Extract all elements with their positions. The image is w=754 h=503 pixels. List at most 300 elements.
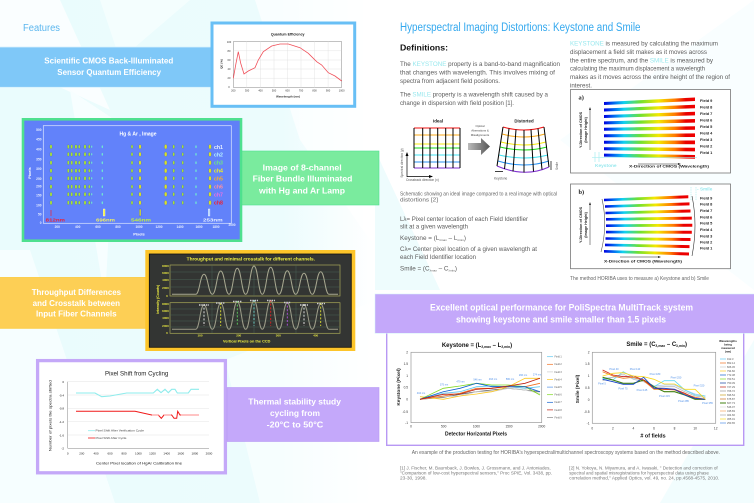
panel: pixel shift chart: -2 <box>61 446 64 450</box>
rainbow strips b <box>604 195 692 256</box>
chart: smile: Pixel 145 <box>637 388 648 392</box>
panel b: smile measurement: Field 3 <box>700 233 713 238</box>
panel: Hg and Ar image: 1000 <box>135 225 143 229</box>
keystone legend: Field 8 <box>554 409 562 412</box>
keystone legend <box>547 356 562 419</box>
keystone series <box>420 378 540 399</box>
channel colour overlays <box>204 300 321 326</box>
panel: quantum efficiency chart: 500 <box>272 88 277 92</box>
reference 1: [1] J. Fischer, M. Baumback, J. Bowles, J. Grossmann, and J. Antoniades, <box>400 465 551 471</box>
panel: quantum efficiency chart: 200 <box>231 88 236 92</box>
panel a: keystone measurement: (Image Height) <box>584 116 588 143</box>
panel: quantum efficiency chart: 100 <box>227 40 232 44</box>
chart: smile: Pixel 285 <box>678 399 689 403</box>
panel: Hg and Ar image: Pixels <box>133 232 146 236</box>
panel: pixel shift chart: -1.2 <box>59 420 64 424</box>
chart: smile <box>575 339 737 439</box>
channel labels: ch3 <box>214 161 223 167</box>
panel b: smile measurement: Field 1 <box>700 246 713 251</box>
smile legend: 750.39 <box>727 381 735 385</box>
panel: pixel shift chart: 1800 <box>192 451 199 455</box>
definition: keystone: The KEYSTONE property is a band-to-band magnification <box>400 61 561 68</box>
feature band: throughput and crosstalk <box>0 278 146 328</box>
chart: smile: Pixel 75 <box>618 386 628 390</box>
formula definitions: λmin <box>457 238 464 242</box>
panel: pixel shift chart: 400 <box>93 451 99 455</box>
chart: keystone: 479 nm <box>456 380 465 384</box>
panel: quantum efficiency chart: 40 <box>228 67 231 71</box>
panel: pixel shift chart: 1200 <box>149 451 156 455</box>
panel: throughput chart: 0 <box>166 331 168 335</box>
panel: throughput chart: 100 <box>197 333 203 337</box>
panel: throughput chart: 0 <box>166 294 168 298</box>
formula definitions: each Field Identifier location <box>400 254 477 261</box>
chart: smile: Pixel 110 <box>630 367 641 371</box>
measurement description: displacement a field slit makes as it moves across <box>570 49 707 56</box>
chart: smile: Pixel 250 <box>671 376 682 380</box>
chart: smile: 2 <box>588 350 590 354</box>
panel: Hg and Ar image: 2000 <box>228 223 236 227</box>
panel b: smile measurement <box>570 184 730 269</box>
spectral spots <box>50 144 211 205</box>
panel: pixel shift chart: 2000 <box>206 451 213 455</box>
smile series <box>603 370 705 399</box>
chart: keystone: 274 nm <box>533 374 541 376</box>
panel b: smile measurement: Field 6 <box>700 214 713 219</box>
smile legend: 696.54 <box>727 393 735 397</box>
definition: smile: change in dispersion with field position [1]. <box>400 100 514 107</box>
results banner: showing keystone and smile smaller than 1.5 pixels <box>456 314 666 324</box>
panel: throughput chart: 8000 <box>162 302 169 306</box>
panel: quantum efficiency chart: 700 <box>299 88 304 92</box>
smile legend: 763.51 <box>727 377 735 381</box>
panel: Hg and Ar image: 300 <box>36 167 42 171</box>
results panel frame <box>387 332 744 445</box>
panel a: keystone measurement: X-Direction of CMOS (Wavelength) <box>629 164 710 168</box>
panel: throughput chart: 300 <box>276 333 281 337</box>
ideal grid <box>400 119 460 182</box>
chart: keystone: 2 <box>406 350 408 354</box>
wavelength markers: 696nm <box>96 217 115 222</box>
chart: smile: λ,max <box>656 344 665 348</box>
chart: keystone: λ,max <box>481 345 491 349</box>
chart: keystone: Keystone (Pixel) <box>396 368 402 406</box>
panel b: smile measurement: Field 4 <box>700 227 713 232</box>
panel: quantum efficiency chart: 400 <box>258 88 263 92</box>
panel: quantum efficiency chart: 900 <box>326 88 331 92</box>
panel: Hg and Ar image: 200 <box>36 184 42 188</box>
panel: quantum efficiency chart: 1000 <box>339 88 345 92</box>
measurement description <box>570 41 730 89</box>
reference 1: "Comparison of low-cost hyperspectral sensors," Proc SPIE, Vol. 3438, pp. <box>400 470 552 476</box>
measurement description: the entire spectrum, and the SMILE is measured by <box>570 57 714 64</box>
reference 2: [2] N. Yokoya, N. Miyamura, and A. Iwasaki, " Detection and correction of <box>569 465 718 471</box>
panel: quantum efficiency chart: QE (%) <box>220 59 224 69</box>
chart: keystone: -1 <box>405 421 408 425</box>
panel: pixel shift chart <box>38 361 225 473</box>
chart: smile: 0.5 <box>585 386 590 390</box>
panel: Hg and Ar image: 500 <box>36 128 42 132</box>
feature band: fiber bundle image: with Hg and Ar Lamp <box>258 186 345 195</box>
chart: smile: Pixel 320 <box>694 384 705 388</box>
panel a: keystone measurement: Field 3 <box>700 137 713 142</box>
chart: smile: ) <box>685 342 687 348</box>
panel: Hg and Ar image: 350 <box>36 157 42 161</box>
results banner <box>375 294 754 333</box>
chart: keystone: 2000 <box>538 425 545 429</box>
channel labels: ch1 <box>214 145 223 151</box>
keystone legend: Field 7 <box>554 401 562 404</box>
formula definitions: λmin <box>448 269 455 273</box>
chart: keystone: ) <box>510 343 512 349</box>
channel labels: ch6 <box>214 185 223 191</box>
panel: Hg and Ar image: 0 <box>40 221 42 225</box>
smile legend: 912.3 <box>727 357 734 361</box>
measurement description: makes as it moves across the entire height of the region of <box>570 74 730 81</box>
keystone legend: Field 1 <box>554 356 562 359</box>
panel: pixel shift chart: -0.8 <box>59 407 64 411</box>
panel: pixel shift chart: 1600 <box>177 451 184 455</box>
chart: keystone: 463 nm <box>489 378 497 381</box>
method caption: The method HORIBA uses to measure a) Keystone and b) Smile <box>570 276 709 282</box>
chart: smile: 2 <box>612 427 614 431</box>
panel: quantum efficiency chart: 800 <box>312 88 317 92</box>
panel: pixel shift chart: Center Pixel location of HgAr Calibration line <box>96 461 182 465</box>
chart: smile: 1.5 <box>585 362 590 366</box>
smile legend: 404.66 <box>727 413 735 417</box>
smile legend: being <box>724 342 732 346</box>
panel: quantum efficiency chart: Wavelength (nm) <box>276 94 300 98</box>
formula definitions: ) <box>464 235 466 242</box>
panel b: smile measurement: Field 5 <box>700 221 713 226</box>
panel a: keystone measurement: Field 4 <box>700 130 713 135</box>
chart: smile: 1 <box>588 374 590 378</box>
panel: Hg and Ar image: 450 <box>36 137 42 141</box>
panel: throughput chart: 400 <box>313 333 319 337</box>
panel: Hg and Ar image: Hg & Ar , Image <box>119 132 157 138</box>
feature band: thermal stability: -20°C to 50°C <box>267 420 324 429</box>
panel: Hg and Ar image: 100 <box>36 204 42 208</box>
panel: pixel shift chart: 600 <box>107 451 113 455</box>
panel: throughput chart: 6000 <box>162 271 169 275</box>
panel: Hg and Ar image: 400 <box>36 148 42 152</box>
panel: throughput chart: 2000 <box>162 286 169 290</box>
chart: smile: Smile = (C <box>626 342 656 348</box>
chart: keystone: Detector Horizontal Pixels <box>445 432 507 438</box>
lower intensity trace <box>172 301 338 329</box>
panel: Hg and Ar image: 150 <box>36 194 42 198</box>
distorted grid: Distorted <box>514 119 534 124</box>
panel b: smile measurement: X-Direction of CMOS (Wavelength) <box>604 258 683 264</box>
measurement description: calculating the maximum displacement a wavelength <box>570 66 706 73</box>
feature band: throughput and crosstalk: Input Fiber Channels <box>36 310 117 319</box>
chart: smile: 8 <box>674 427 676 431</box>
quantum efficiency curve <box>233 44 342 81</box>
reference 2 <box>569 465 719 481</box>
keystone legend: Field 6 <box>554 394 562 397</box>
panel a: keystone measurement: Keystone <box>595 163 617 169</box>
reference 2: correlation method," Applied Optics, vol. 49, no. 24, pp.4568-4575, 2010. <box>569 475 719 481</box>
panel: Hg and Ar image <box>23 119 241 241</box>
panel b: smile measurement: Field 2 <box>700 240 713 245</box>
wavelength markers <box>46 209 223 222</box>
feature band: fiber bundle image: Fiber Bundle Illuminated <box>253 175 352 184</box>
channel labels: ch5 <box>214 176 223 182</box>
reference 1 <box>400 465 552 481</box>
panel: pixel shift chart: 800 <box>121 451 127 455</box>
panel: Hg and Ar image: 1200 <box>155 225 163 229</box>
schematic caption: distortions [2] <box>400 198 439 204</box>
definition: smile: The SMILE property is a wavelength shift caused by a <box>400 92 549 99</box>
diagram: ideal versus distorted <box>400 119 559 182</box>
keystone legend: Field 3 <box>554 371 562 374</box>
panel a: keystone measurement: Field 9 <box>700 98 713 103</box>
formula definitions: – C <box>437 266 449 273</box>
chart: keystone: 1500 <box>505 425 513 429</box>
feature band: quantum efficiency: Scientific CMOS Back-Illuminated <box>44 56 173 65</box>
panel: Hg and Ar image: Pixels <box>27 166 32 179</box>
chart: keystone: -0.5 <box>402 410 408 414</box>
chart: keystone: 1 <box>406 374 408 378</box>
panel: pixel shift chart: 1000 <box>135 451 142 455</box>
smile legend: 546.07 <box>727 405 735 409</box>
feature band: thermal stability: Thermal stability study <box>248 397 342 406</box>
panel b: smile measurement: Y-Direction of CMOS <box>579 206 583 243</box>
arrow: optical aberrations: Optical <box>476 124 485 128</box>
rainbow strips a <box>604 98 695 159</box>
smile legend <box>719 339 737 425</box>
chart: smile: 0 <box>591 427 593 431</box>
chart: keystone <box>396 343 562 438</box>
chart: smile: 10 <box>693 427 697 431</box>
chart: keystone: 500 <box>441 425 447 429</box>
panel: Hg and Ar image: 1800 <box>212 225 220 229</box>
panel: Hg and Ar image: 200 <box>55 225 60 229</box>
panel: pixel shift chart: -1.6 <box>59 433 64 437</box>
feature band: fiber bundle image: Image of 8-channel <box>263 164 342 173</box>
chart: smile: # of fields <box>640 433 666 439</box>
formula definitions: slit at a given wavelength <box>400 224 469 231</box>
panel: Hg and Ar image: 1600 <box>195 225 203 229</box>
wavelength markers: 253nm <box>203 217 223 222</box>
panel b: smile measurement: b) <box>578 189 584 196</box>
chart: keystone: 0 <box>406 398 408 402</box>
panel a: keystone measurement: Field 6 <box>700 117 713 122</box>
panel: pixel shift chart: -0.4 <box>59 393 64 397</box>
panel: pixel shift chart: 200 <box>79 451 85 455</box>
chart: keystone: 580 nm <box>506 378 514 381</box>
legend: Pixel Shift After Cycle <box>96 436 127 440</box>
panel: throughput chart: Vertical Pixels on the CCD <box>223 339 271 343</box>
panel: throughput chart: 200 <box>236 333 242 337</box>
panel: quantum efficiency chart: 0 <box>228 85 230 89</box>
panel: quantum efficiency chart: 60 <box>228 58 231 62</box>
panel: pixel shift chart: 0 <box>62 380 64 384</box>
feature band: throughput and crosstalk: Throughput Differences <box>32 288 122 297</box>
feature band: thermal stability <box>227 388 379 442</box>
red series <box>76 411 199 418</box>
chart: smile: Pixel 355 <box>702 401 713 405</box>
keystone legend: Field 4 <box>554 378 562 381</box>
chart: smile: λ,min <box>676 344 685 348</box>
panel: Hg and Ar image: 600 <box>95 225 101 229</box>
smile legend: 794.82 <box>727 369 735 373</box>
formula definitions: ) <box>455 266 457 273</box>
smile legend: 772.38 <box>727 373 735 377</box>
feature band: throughput and crosstalk: and Crosstalk between <box>33 299 120 308</box>
legend <box>88 429 145 440</box>
feature band: quantum efficiency: Sensor Quantum Efficiency <box>57 68 162 77</box>
panel b: smile measurement: Smile <box>700 187 713 192</box>
panel: quantum efficiency chart: 600 <box>285 88 290 92</box>
smile legend: Wavelengths <box>719 339 737 343</box>
chart: smile: Pixel 215 <box>659 394 670 398</box>
smile legend: 727.29 <box>727 385 735 389</box>
chart: smile: 4 <box>633 427 635 431</box>
smile legend: 706.72 <box>727 389 735 393</box>
keystone legend: Field 5 <box>554 386 562 389</box>
chart: smile: Smile (Pixel) <box>575 374 581 403</box>
panel b: smile measurement: Field 8 <box>700 202 713 207</box>
channel labels: ch7 <box>214 192 223 198</box>
panel: throughput chart <box>147 252 353 349</box>
panel a: keystone measurement: Field 8 <box>700 104 713 109</box>
panel: quantum efficiency chart <box>212 23 355 106</box>
chart: keystone: 266 nm <box>519 374 527 377</box>
formula definitions <box>400 216 537 273</box>
chart: smile: -1 <box>587 422 590 426</box>
channel labels: ch8 <box>214 201 223 207</box>
arrow: optical aberrations: Misalignments <box>471 133 490 137</box>
ideal grid: Spectral direction (y) <box>400 148 404 178</box>
formula definitions: Keystone = (L <box>400 235 438 242</box>
formula definitions: – L <box>447 235 458 242</box>
panel b: smile measurement: Field 9 <box>700 196 713 201</box>
cyan series <box>76 389 199 397</box>
distorted grid: Keystone <box>494 176 508 180</box>
definition: keystone <box>400 61 561 85</box>
ideal grid: Crosstrack direction (x) <box>406 178 439 182</box>
panel a: keystone measurement: Field 7 <box>700 111 712 116</box>
formula definitions: λmax <box>439 238 447 242</box>
reference 1: 23-30, 1998. <box>400 475 427 481</box>
smile legend: 675.87 <box>727 397 735 401</box>
legend: Pixel Shift After Verification Cycle <box>96 429 145 433</box>
panel: Hg and Ar image: 1400 <box>176 225 184 229</box>
chart: keystone: Keystone = (L <box>442 343 481 349</box>
panel: Hg and Ar image: 50 <box>38 212 42 216</box>
chart: keystone: 0 <box>410 425 412 429</box>
chart: keystone: 404 nm <box>417 392 425 395</box>
definition: keystone: spectra from adjacent field positions. <box>400 78 500 85</box>
upper intensity trace <box>172 266 338 294</box>
panel b: smile measurement: (Image Height) <box>584 211 588 238</box>
chart: smile: Pixel 180 <box>650 372 661 376</box>
chart: smile: – C <box>665 342 677 348</box>
panel: throughput chart: 8000 <box>162 264 169 268</box>
measurement description: KEYSTONE is measured by calculating the maximum <box>570 41 718 48</box>
chart: keystone: 546 nm <box>473 378 482 382</box>
chart: smile: 0 <box>588 398 590 402</box>
panel: Hg and Ar image: 800 <box>115 225 121 229</box>
panel: Hg and Ar image: 250 <box>36 177 42 181</box>
right column title: Hyperspectral Imaging Distortions: Keystone and Smile <box>400 22 640 34</box>
panel: quantum efficiency chart: Quantum Efficiency <box>271 33 305 37</box>
smile legend: 852.14 <box>727 361 735 365</box>
panel a: keystone measurement: Field 2 <box>700 143 713 148</box>
wavelength markers: 812nm <box>46 217 65 222</box>
ideal grid: Ideal <box>433 119 443 124</box>
distorted grid <box>494 119 559 180</box>
feature band: thermal stability: cycling from <box>270 409 320 418</box>
smile legend: 365.01 <box>727 417 735 421</box>
chart: keystone: λ,min <box>501 345 510 349</box>
channel labels: ch2 <box>214 152 223 158</box>
panel: pixel shift chart: Pixel Shift from Cycling <box>105 371 169 378</box>
chart: keystone: – L <box>491 343 502 349</box>
panel: throughput chart: 4000 <box>162 316 169 320</box>
panel: throughput chart: Throughput and minimal crosstalk for different channels. <box>187 257 315 262</box>
panel: throughput chart: 6000 <box>162 309 169 313</box>
heading: features: Features <box>23 23 60 34</box>
arrow: optical aberrations <box>468 124 490 155</box>
feature band: fiber bundle image <box>242 151 379 205</box>
panel: quantum efficiency chart: 300 <box>245 88 250 92</box>
panel: pixel shift chart: 1400 <box>163 451 170 455</box>
formula definitions: λmax <box>430 269 437 273</box>
feature band: quantum efficiency <box>0 47 212 87</box>
chart: smile: Pixel 40 <box>609 367 619 371</box>
smile legend: 253.65 <box>727 421 735 425</box>
panel: pixel shift chart: Number of pixels the spectra shifted <box>48 380 52 451</box>
definition: smile <box>400 92 549 107</box>
smile legend: measured <box>721 346 735 350</box>
panel a: keystone measurement: a) <box>578 94 584 102</box>
panel: throughput chart: 4000 <box>162 278 169 282</box>
smile legend: 667.73 <box>727 401 735 405</box>
panel: Hg and Ar image: 400 <box>75 225 81 229</box>
formula definitions: Cλ= Center pixel location of a given wavelength at <box>400 246 537 253</box>
production testing caption: An example of the production testing for HORIBA's hyperspectral/multichannel spectroscopy systems based on the method described above. <box>412 450 720 456</box>
smile legend: 826.45 <box>727 365 735 369</box>
schematic caption: Schematic showing an ideal image compared to a real image with optical <box>400 192 557 198</box>
chart: keystone: 1.5 <box>404 362 408 366</box>
reference 2: spectral and spatial misregistrations for hyperspectral data using phase <box>569 470 709 476</box>
keystone legend: Field 2 <box>554 363 562 366</box>
keystone legend: Field 9 <box>554 416 562 419</box>
wavelength markers: 546nm <box>131 217 151 222</box>
panel: quantum efficiency chart: 20 <box>228 76 231 80</box>
schematic caption <box>400 192 557 204</box>
chart: smile: 12 <box>714 427 718 431</box>
channel labels: ch4 <box>214 169 223 175</box>
panel: throughput chart: Intensity (Counts) <box>156 285 160 314</box>
panel a: keystone measurement <box>570 90 730 173</box>
chart: smile: Pixel 5 <box>598 382 606 386</box>
formula definitions: Smile = (C <box>400 266 429 273</box>
smile legend: 435.83 <box>727 409 735 413</box>
panel a: keystone measurement: Field 1 <box>700 150 713 155</box>
panel a: keystone measurement: Y-Direction of CMOS <box>579 111 583 148</box>
formula definitions: Lλ= Pixel center location of each Field Identifier <box>400 216 528 223</box>
panel: pixel shift chart: 0 <box>67 451 69 455</box>
panel: throughput chart: 2000 <box>162 324 169 328</box>
definitions heading: Definitions: <box>400 44 448 53</box>
definition: keystone: that changes with wavelength. This involves mixing of <box>400 70 555 76</box>
channel labels <box>214 145 223 207</box>
chart: smile: -0.5 <box>584 410 590 414</box>
smile legend: (nm) <box>725 350 731 354</box>
